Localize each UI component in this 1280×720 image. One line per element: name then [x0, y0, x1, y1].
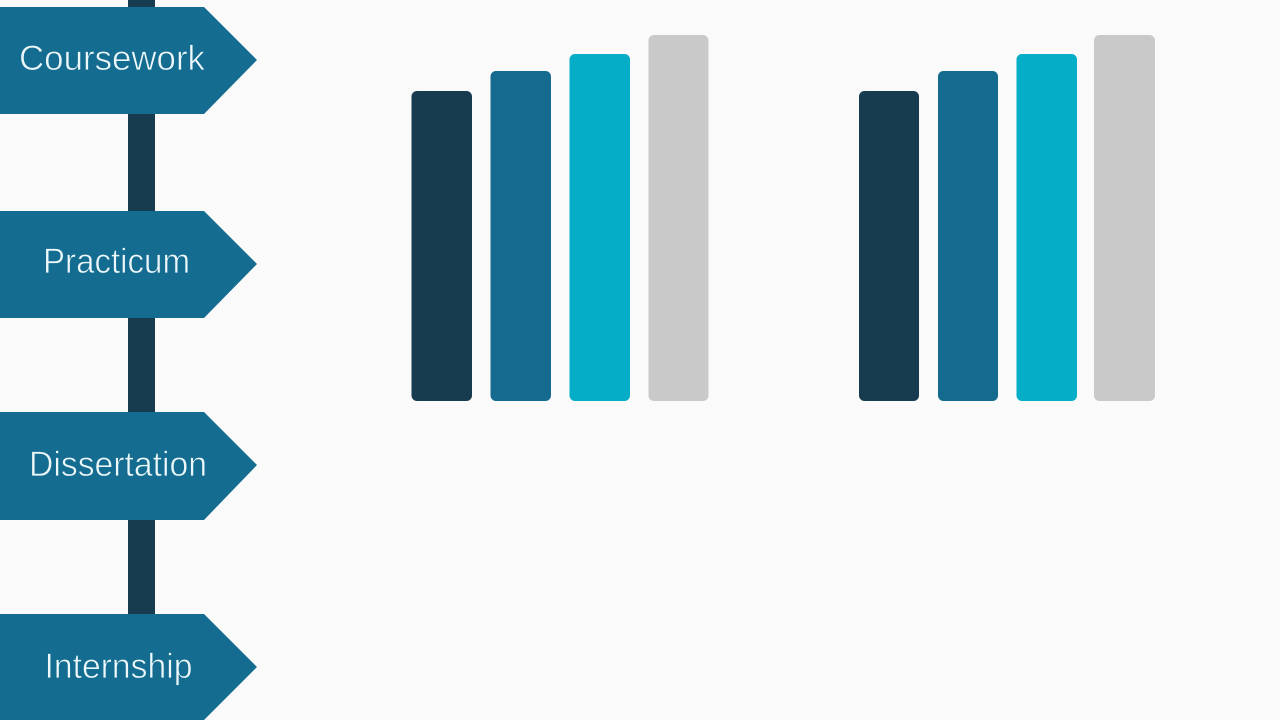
arrow: Dissertation: [0, 412, 257, 520]
bar chart: right: [859, 35, 1155, 401]
arrow: Practicum: [0, 211, 257, 318]
arrow: Coursework: Coursework: [19, 39, 205, 78]
arrow: Coursework: [0, 7, 257, 114]
arrow: Practicum: Practicum: [43, 242, 190, 281]
bar chart: left: [412, 35, 708, 401]
arrow: Dissertation: Dissertation: [29, 445, 207, 484]
arrow: Internship: Internship: [44, 647, 192, 686]
arrow: Internship: [0, 614, 257, 720]
vertical connector spine: [128, 0, 155, 720]
